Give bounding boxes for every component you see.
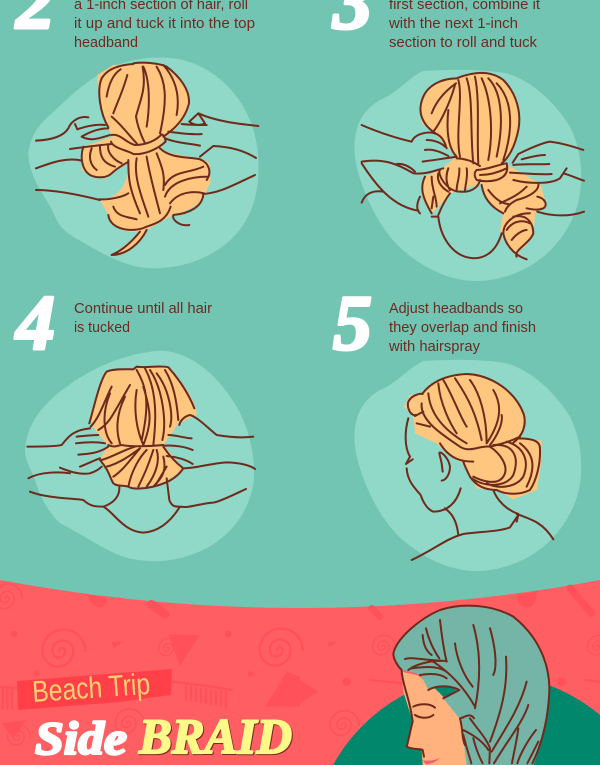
- step 4 text: Continue until all hair: [74, 301, 212, 317]
- step 4 number: 4: [14, 279, 55, 366]
- step 2 illustration: [28, 57, 259, 268]
- step 5 illustration: [354, 360, 581, 571]
- title: Side BRAID: BRAID: [139, 709, 293, 765]
- step 3 text: with the next 1-inch: [388, 16, 518, 32]
- step 5 text: [388, 301, 536, 355]
- title: Side BRAID: Side: [35, 713, 127, 765]
- banner: Beach Trip: Beach Trip: [31, 668, 151, 709]
- step 5 text: Adjust headbands so: [389, 301, 523, 317]
- step 5 text: they overlap and finish: [389, 320, 536, 336]
- step 4 text: [74, 301, 212, 336]
- step 5 number: 5: [333, 279, 372, 366]
- step 3 text: section to roll and tuck: [389, 35, 538, 51]
- step 2 text: [74, 0, 255, 51]
- step 2 text: headband: [74, 35, 138, 51]
- panel: side braid header background: [0, 580, 600, 765]
- title: Side BRAID: [35, 708, 293, 765]
- step 3 text: [388, 0, 540, 51]
- green circle behind woman: [333, 674, 600, 765]
- step 4 illustration: [25, 351, 255, 561]
- illustration: woman with side braid: [393, 606, 549, 765]
- background pattern right: [300, 588, 600, 735]
- step 3 illustration: [354, 70, 584, 281]
- step 5 text: with hairspray: [388, 339, 481, 355]
- step 4 text: is tucked: [74, 320, 130, 336]
- step 2 text: it up and tuck it into the top: [74, 16, 255, 32]
- title: Side BRAID: BRAID: [138, 708, 292, 764]
- background pattern left: [0, 584, 303, 745]
